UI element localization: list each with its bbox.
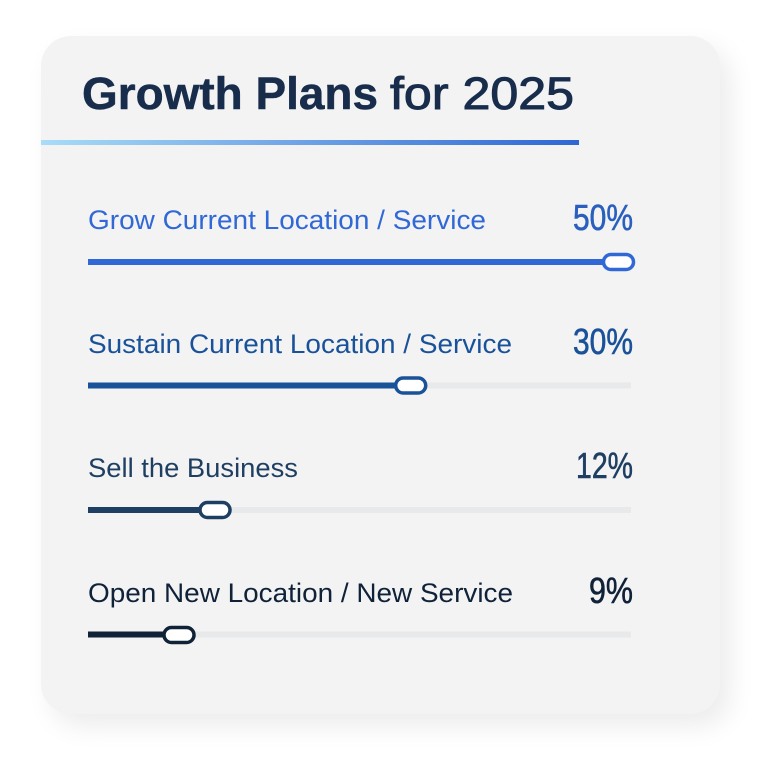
row: Open New Location / New Service 9%: Open New Location / New Service [88, 578, 513, 608]
title [82, 68, 574, 119]
row: Grow Current Location / Service 50%: Grow Current Location / Service [88, 205, 486, 235]
title: Growth Plans [82, 68, 378, 119]
row: Grow Current Location / Service 50% [88, 197, 634, 270]
row: Open New Location / New Service 9%: 9% [589, 570, 633, 611]
row: Grow Current Location / Service 50%: 50% [573, 197, 633, 238]
row: Sell the Business 12% [88, 445, 633, 518]
row: Sustain Current Location / Service 30%: 30% [573, 321, 633, 362]
panel: growth plans card [41, 36, 720, 714]
row: Sell the Business 12%: Sell the Business [88, 453, 298, 483]
row: Sustain Current Location / Service 30% [88, 321, 633, 393]
title: for 2025 [390, 68, 574, 119]
title underline [41, 140, 579, 145]
row: Sustain Current Location / Service 30%: Sustain Current Location / Service [88, 329, 512, 359]
row: Sell the Business 12%: 12% [576, 445, 633, 486]
row: Open New Location / New Service 9% [88, 570, 633, 642]
